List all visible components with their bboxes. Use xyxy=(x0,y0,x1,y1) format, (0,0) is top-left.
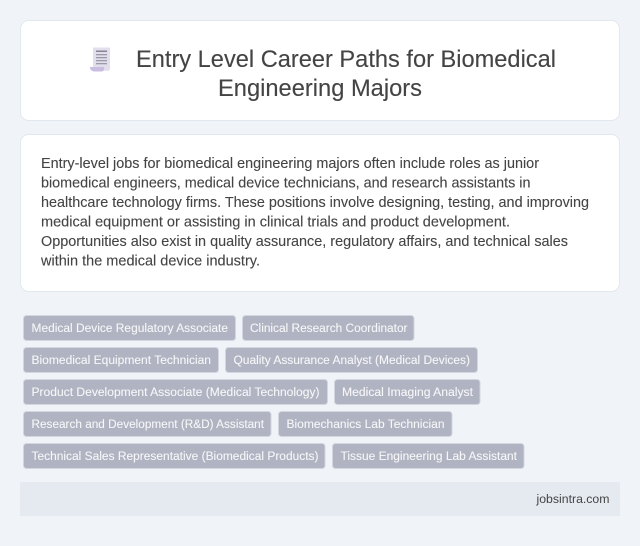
footer bar xyxy=(20,482,620,516)
title xyxy=(136,46,556,102)
tag: Technical Sales Representative (Biomedical Products) xyxy=(24,444,325,468)
panel: description xyxy=(20,134,620,292)
tag: Medical Imaging Analyst xyxy=(334,380,480,404)
tag: Medical Device Regulatory Associate xyxy=(24,316,236,340)
tag list: career paths xyxy=(24,316,524,468)
title: Engineering Majors xyxy=(218,75,422,102)
tag: Quality Assurance Analyst (Medical Devices): Quality Assurance Analyst (Medical Devices) xyxy=(234,353,470,367)
text block: description paragraph: healthcare technology firms. These positions involve designing, testing, and improving xyxy=(41,195,589,211)
text block: description paragraph xyxy=(40,156,589,270)
icon: paper receipt scroll xyxy=(90,48,110,72)
tag: Product Development Associate (Medical Technology): Product Development Associate (Medical Technology) xyxy=(32,385,320,399)
text block: description paragraph: biomedical engineers, medical device technicians, and research assistants in xyxy=(41,176,531,192)
text block: description paragraph: medical equipment or assisting in clinical trials and product development. xyxy=(41,214,510,230)
tag: Tissue Engineering Lab Assistant: Tissue Engineering Lab Assistant xyxy=(340,449,518,463)
tag: Medical Imaging Analyst: Medical Imaging Analyst xyxy=(342,385,474,399)
title: Entry Level Career Paths for Biomedical xyxy=(136,46,556,73)
tag: Clinical Research Coordinator xyxy=(242,316,414,340)
tag: Clinical Research Coordinator: Clinical Research Coordinator xyxy=(250,321,408,335)
panel: title header xyxy=(20,20,620,120)
tag: Biomechanics Lab Technician xyxy=(278,412,452,436)
tag: Biomechanics Lab Technician: Biomechanics Lab Technician xyxy=(286,417,445,431)
tag: Biomedical Equipment Technician: Biomedical Equipment Technician xyxy=(32,353,211,367)
tag: Research and Development (R&D) Assistant xyxy=(24,412,271,436)
text block: description paragraph: within the medical device industry. xyxy=(40,254,260,270)
tag: Research and Development (R&D) Assistant: Research and Development (R&D) Assistant xyxy=(32,417,265,431)
tag: Quality Assurance Analyst (Medical Devices) xyxy=(226,348,478,372)
tag: Tissue Engineering Lab Assistant xyxy=(332,444,524,468)
text block: description paragraph: Entry-level jobs for biomedical engineering majors often include roles as junior xyxy=(41,156,539,172)
tag: Product Development Associate (Medical Technology) xyxy=(24,380,328,404)
tag: Biomedical Equipment Technician xyxy=(24,348,218,372)
tag: Technical Sales Representative (Biomedical Products): Technical Sales Representative (Biomedical Products) xyxy=(32,449,318,463)
tag: Medical Device Regulatory Associate: Medical Device Regulatory Associate xyxy=(32,321,228,335)
text block: description paragraph: Opportunities also exist in quality assurance, regulatory affairs, and technical sales xyxy=(41,234,568,250)
footer source text: jobsintra.com xyxy=(536,492,610,506)
